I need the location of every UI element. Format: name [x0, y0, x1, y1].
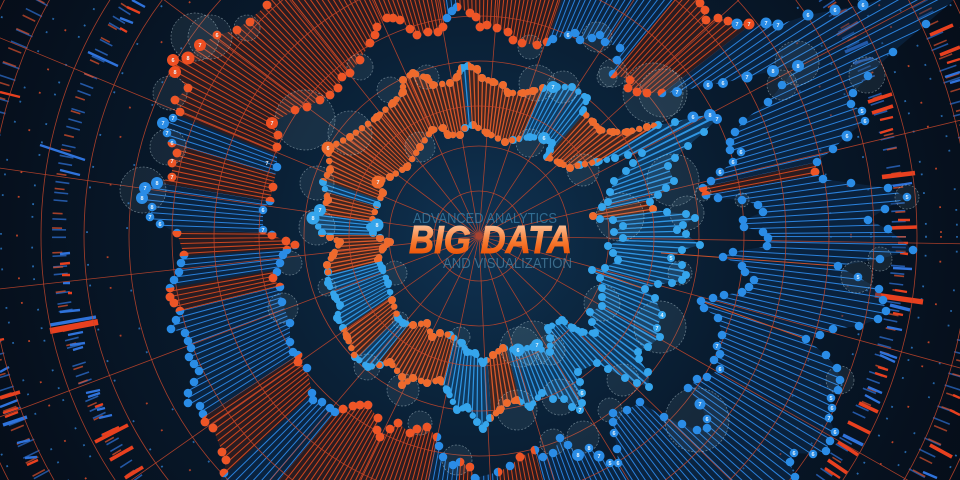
- data point digits: 8: [140, 196, 144, 202]
- data point digits: 7: [827, 416, 831, 422]
- inner ring orange data points: [313, 66, 658, 429]
- data point digits: 7: [143, 186, 147, 192]
- data point digits: 7: [165, 131, 169, 137]
- subtitle top: ADVANCED ANALYTICS: [413, 210, 557, 227]
- data point digits: 6: [721, 81, 725, 87]
- data point digits: 6: [731, 160, 735, 166]
- large highlighted data points: [136, 0, 868, 462]
- data point digits: 6: [616, 461, 620, 467]
- data point digits: 6: [861, 3, 865, 9]
- data point digits: 5: [856, 275, 860, 281]
- data point digits: 8: [311, 216, 315, 222]
- data point digits: 7: [261, 228, 265, 234]
- data point digits: 6: [566, 33, 570, 39]
- data point digits: 6: [261, 208, 265, 214]
- data point digits: 6: [739, 150, 743, 156]
- data point digits: 7: [161, 121, 165, 127]
- single highlighted orange lines: [592, 253, 838, 339]
- data point digits: 7: [655, 326, 659, 332]
- data point digits: 7: [170, 159, 174, 165]
- data point digits: 5: [608, 461, 612, 467]
- main heading: BIG DATA: [409, 219, 572, 262]
- outer ring orange data points: [170, 3, 823, 473]
- inner ring fan lines: [316, 70, 714, 425]
- data point digits: 6: [170, 141, 174, 147]
- data point digits: 5: [669, 256, 673, 262]
- data point digits: 8: [708, 113, 712, 119]
- data point digits: 7: [747, 22, 751, 28]
- data point digits: 7: [265, 161, 269, 167]
- data point digits: 5: [829, 396, 833, 402]
- data point digits: 5: [860, 109, 864, 115]
- data point digits: 7: [715, 344, 719, 350]
- data point digits: 7: [318, 208, 322, 214]
- data point digits: 6: [718, 367, 722, 373]
- data point digits: 8: [155, 181, 159, 187]
- data point digits: 6: [863, 119, 867, 125]
- data point digits: 7: [597, 454, 601, 460]
- data point digits: 6: [542, 136, 546, 142]
- data point digits: 8: [576, 453, 580, 459]
- data point digits: 7: [535, 343, 539, 349]
- data point digits: 8: [150, 205, 154, 211]
- data point digits: 8: [587, 446, 591, 452]
- data point digits: 7: [270, 121, 274, 127]
- data point digits: 6: [706, 83, 710, 89]
- data point digits: 8: [186, 56, 190, 62]
- data point digits: 6: [845, 134, 849, 140]
- data point digits: 5: [905, 195, 909, 201]
- data point digits: 8: [796, 64, 800, 70]
- data point digits: 7: [698, 402, 702, 408]
- data point digits: 6: [580, 391, 584, 397]
- data point digits: [140, 3, 909, 467]
- data point digits: 6: [718, 170, 722, 176]
- data point digits: 6: [171, 58, 175, 64]
- data point digits: 6: [326, 146, 330, 152]
- data point digits: 7: [776, 23, 780, 29]
- data point digits: 6: [833, 8, 837, 14]
- data point digits: 7: [578, 408, 582, 414]
- subtitle bottom: AND VISUALIZATION: [443, 255, 572, 272]
- data point digits: 6: [691, 115, 695, 121]
- data point digits: 7: [735, 22, 739, 28]
- data point digits: 6: [833, 430, 837, 436]
- data point digits: 7: [764, 21, 768, 27]
- data point digits: 6: [705, 417, 709, 423]
- data point digits: 6: [792, 451, 796, 457]
- inner ring blue data points: [313, 66, 717, 429]
- data point digits: 8: [173, 70, 177, 76]
- data point digits: 6: [612, 431, 616, 437]
- data point digits: 6: [830, 406, 834, 412]
- data point digits: 8: [771, 69, 775, 75]
- data point digits: 7: [551, 85, 555, 91]
- data point digits: 7: [376, 180, 380, 186]
- data point digits: 7: [675, 90, 679, 96]
- title block: [409, 210, 572, 272]
- data point digits: 6: [516, 348, 520, 354]
- data point digits: 8: [375, 223, 379, 229]
- data point digits: 6: [215, 33, 219, 39]
- data point digits: 7: [170, 175, 174, 181]
- data point digits: 7: [171, 116, 175, 122]
- inner ring orange sectors: [324, 70, 660, 416]
- data point digits: 7: [148, 215, 152, 221]
- data point digits: 4: [660, 313, 664, 319]
- data point digits: 7: [715, 117, 719, 123]
- data point digits: 7: [198, 43, 202, 49]
- data point digits: 6: [806, 13, 810, 19]
- outer ring orange sectors: [162, 0, 816, 480]
- data point digits: 6: [158, 222, 162, 228]
- data point digits: 7: [745, 75, 749, 81]
- data point digits: 6: [811, 452, 815, 458]
